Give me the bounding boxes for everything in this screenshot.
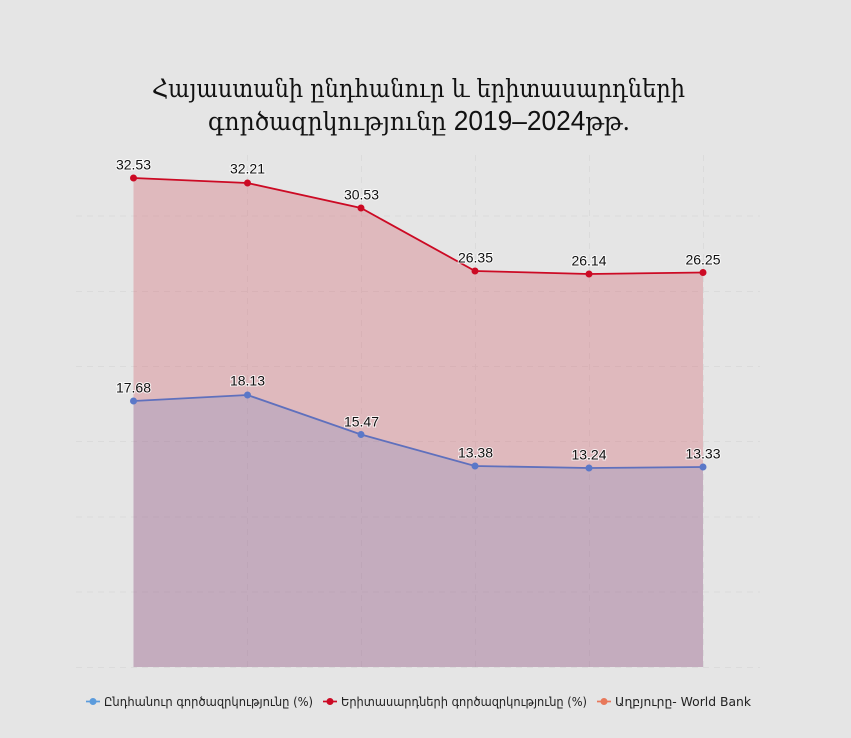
legend: [86, 694, 752, 709]
data labels: youth: 26.25: [685, 252, 721, 268]
data labels: total: [116, 372, 721, 462]
data labels: total: 13.38: [458, 444, 493, 460]
legend item: source: Աղբյուրը- World Bank: [615, 694, 752, 709]
line: youth unemployment: [130, 174, 706, 278]
data labels: youth: 26.35: [458, 250, 493, 266]
legend item: youth: Երիտասարդների գործազրկությունը (%): [341, 694, 587, 709]
legend item: total: Ընդհանուր գործազրկությունը (%): [104, 694, 313, 709]
data labels: youth: 32.21: [230, 160, 265, 176]
title: Հայաստանի ընդհանուր և երիտասարդների: [152, 74, 685, 103]
data labels: youth: [116, 156, 721, 268]
data labels: youth: 32.53: [116, 156, 151, 172]
title: [152, 74, 685, 136]
area: youth unemployment: [134, 178, 703, 667]
data labels: total: 13.33: [685, 446, 721, 462]
data labels: total: 17.68: [116, 380, 151, 396]
title: գործազրկությունը 2019–2024թթ.: [208, 105, 630, 136]
data labels: total: 13.24: [571, 446, 607, 462]
data labels: youth: 30.53: [344, 186, 379, 202]
data labels: total: 18.13: [230, 372, 265, 388]
line: total unemployment: [130, 392, 706, 472]
data labels: total: 15.47: [344, 414, 379, 430]
area chart: unemployment 2019-2024: [116, 156, 721, 667]
data labels: youth: 26.14: [571, 252, 607, 268]
area: total unemployment: [134, 395, 703, 667]
